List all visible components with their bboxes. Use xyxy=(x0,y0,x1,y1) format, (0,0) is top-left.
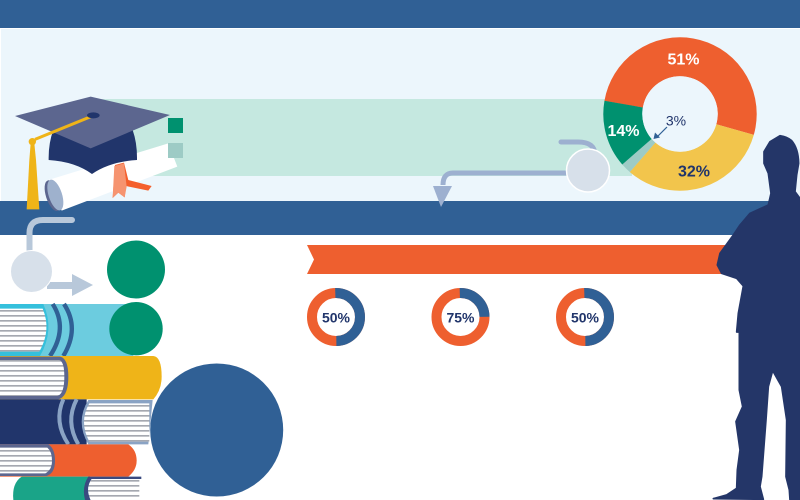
connector node circle, right xyxy=(566,149,610,192)
donut gauge 50% xyxy=(312,293,360,341)
middle blue band xyxy=(0,201,800,235)
connector node circle, left xyxy=(10,250,52,292)
donut gauge 75%: 75% xyxy=(446,310,475,326)
circle marker green upper xyxy=(107,240,165,298)
person silhouette xyxy=(713,136,800,500)
donut chart: shares: 3% xyxy=(666,112,686,128)
legend square pale teal xyxy=(168,143,183,158)
arrow pointing right xyxy=(47,274,93,296)
donut chart: shares: 51% xyxy=(667,52,700,68)
large blue circle xyxy=(150,364,283,496)
legend square green xyxy=(168,118,183,133)
donut gauge 50%: 50% xyxy=(322,310,351,326)
donut gauge 75% xyxy=(436,293,484,341)
donut chart: shares: 32% xyxy=(678,164,710,180)
donut gauge 50% second xyxy=(561,293,609,341)
light header panel xyxy=(1,29,800,201)
orange ribbon banner xyxy=(307,245,740,274)
donut chart: shares: 14% xyxy=(607,123,640,140)
donut chart: shares xyxy=(599,33,761,195)
connector with arrow pointing down xyxy=(433,142,595,207)
donut gauge 50% second: 50% xyxy=(571,310,600,326)
connector pipe left xyxy=(30,220,72,250)
circle marker green lower xyxy=(109,302,163,355)
top banner xyxy=(0,0,800,28)
icon: graduation cap and diploma xyxy=(15,97,177,213)
teal title strip xyxy=(100,99,632,176)
stack of books xyxy=(0,304,162,500)
